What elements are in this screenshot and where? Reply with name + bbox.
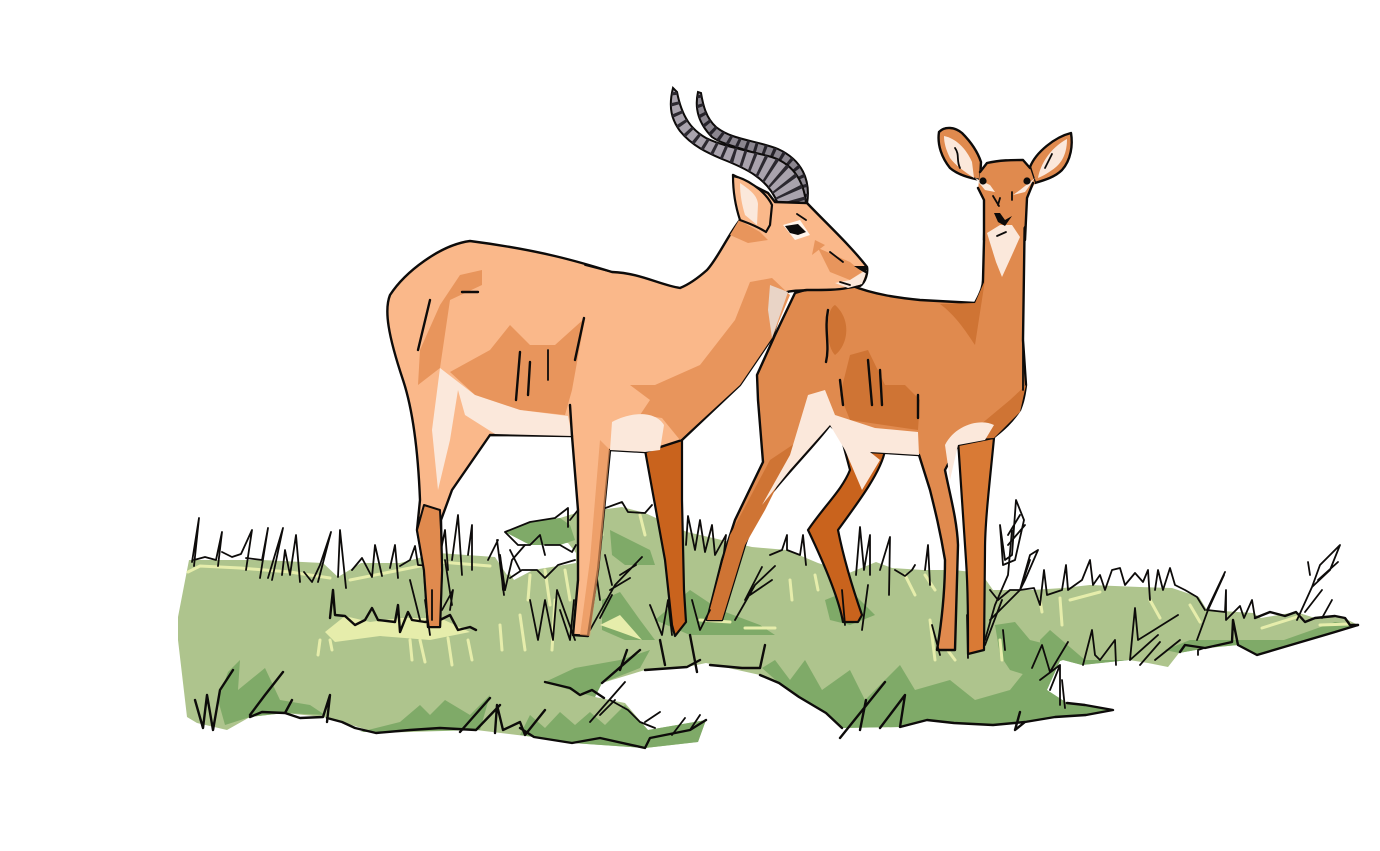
male body and head [387,175,867,636]
female ink creases [826,310,918,418]
male far fore leg [645,440,686,636]
black ink edge and blades along left top [192,518,430,588]
illustration: two antelopes standing on a grass patch [178,86,1360,750]
male shading [418,220,862,636]
bib [987,225,1020,277]
male far hind leg [436,395,492,525]
grass blades in front of legs [410,560,1005,658]
male brow and nose marks [797,214,843,262]
left ear [939,128,981,180]
grass blades near male hind leg [440,515,575,640]
cream eye patches [975,178,1035,195]
male neck cream stripe [768,285,788,338]
face fill [978,160,1035,240]
white gap in grass [499,543,576,580]
female antelope (rear, right) [707,128,1072,654]
grass base [178,507,1358,748]
seed stalks [590,500,1340,640]
face outline [978,160,1033,240]
female head and ears [939,128,1072,277]
eyes [979,177,987,185]
pale lime grass highlights [188,515,1350,665]
black ink line mid left [330,590,476,632]
grass patch [178,500,1358,748]
back horn [697,92,808,204]
female body [707,200,1026,650]
female shading [707,280,1026,620]
right ear [1030,133,1072,183]
horns [671,88,808,205]
male lower hind leg [417,505,442,627]
nose and mouth [994,213,1012,226]
female far hind leg [808,440,885,622]
black ink bottom edge [195,670,706,748]
male antelope (front, left) [387,88,867,636]
female far fore leg [958,438,994,654]
front horn [671,88,806,204]
male ear [733,176,772,232]
dark green shading [218,518,1358,748]
male eye [783,220,810,240]
male face shading [730,220,768,243]
female cream belly [762,390,919,505]
male ink creases [418,292,584,436]
male cream belly and chest [432,270,867,490]
top ink edge right side [505,502,652,555]
